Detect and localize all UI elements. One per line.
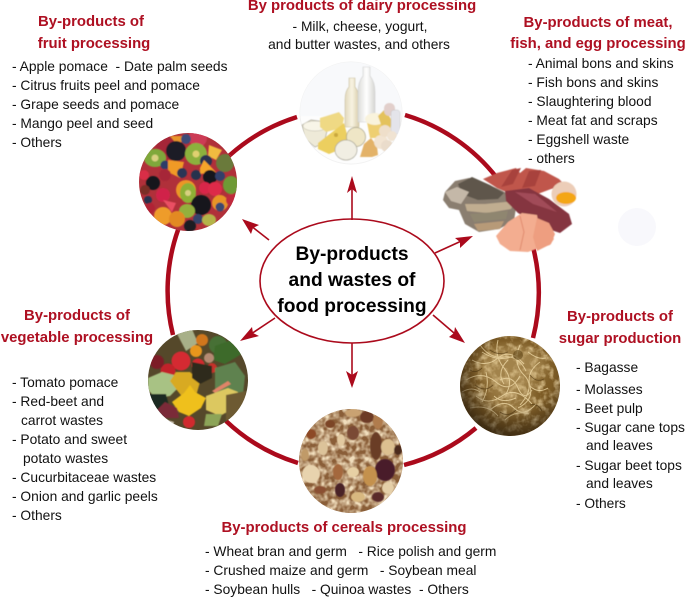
list: cereals: - Crushed maize and germ - Soybean meal [205, 563, 476, 578]
group: dairy processing [248, 0, 476, 52]
photo: vegetable wastes [148, 329, 248, 430]
photo: mixed fruit [139, 129, 239, 232]
list: cereals: - Soybean hulls - Quinoa wastes - Others [205, 582, 469, 597]
heading: sugar: sugar production [559, 331, 681, 347]
list: dairy: - Milk, cheese, yogurt, [293, 19, 427, 34]
heading: fruit: fruit processing [38, 36, 150, 52]
heading: vegetable: By-products of [24, 308, 130, 324]
list: sugar: - Sugar beet tops [576, 458, 682, 473]
photo: cereals and nuts [299, 409, 403, 513]
center title: By-products [296, 244, 408, 265]
list: meat: - Eggshell waste [528, 132, 630, 147]
list: meat: - Slaughtering blood [528, 94, 652, 109]
list: sugar: - Others [576, 496, 626, 511]
list: sugar: - Sugar cane tops [576, 420, 685, 435]
list: fruit: - Mango peel and seed [12, 116, 153, 131]
list: vegetable: - Red-beet and [12, 394, 104, 409]
list: dairy: and butter wastes, and others [268, 37, 450, 52]
list: sugar: and leaves [586, 438, 653, 453]
list: meat: - others [528, 151, 575, 166]
group: meat, fish and egg processing [510, 15, 685, 166]
group: cereals processing [205, 520, 496, 597]
center title: food processing [277, 296, 427, 317]
heading: fruit: By-products of [38, 14, 144, 30]
list: cereals: - Wheat bran and germ - Rice polish and germ [205, 544, 496, 559]
photo: meat, fish and egg [443, 168, 576, 252]
list: vegetable: - Tomato pomace [12, 375, 119, 390]
list: vegetable: - Others [12, 508, 62, 523]
list: sugar: - Bagasse [576, 360, 638, 375]
list: sugar: and leaves [586, 476, 653, 491]
list: vegetable: - Cucurbitaceae wastes [12, 470, 156, 485]
central ring connecting the by-product groups [168, 115, 539, 465]
faint watermark circle [618, 208, 656, 246]
list: fruit: - Grape seeds and pomace [12, 97, 180, 112]
list: sugar: - Molasses [576, 382, 643, 397]
list: fruit: - Citrus fruits peel and pomace [12, 78, 200, 93]
photo: dairy products [300, 62, 402, 164]
list: vegetable: potato wastes [23, 451, 108, 466]
list: fruit: - Apple pomace - Date palm seeds [12, 59, 228, 74]
heading: sugar: By-products of [567, 309, 673, 325]
center title: and wastes of [289, 270, 416, 291]
list: vegetable: - Potato and sweet [12, 432, 127, 447]
heading: meat: fish, and egg processing [510, 36, 685, 52]
heading: cereals: By-products of cereals processing [222, 520, 466, 536]
heading: meat: By-products of meat, [524, 15, 672, 31]
list: vegetable: - Onion and garlic peels [12, 489, 158, 504]
center ellipse [260, 219, 444, 343]
group: fruit processing [12, 14, 228, 150]
group: vegetable processing [1, 308, 158, 523]
list: fruit: - Others [12, 135, 62, 150]
arrows from center to each group [240, 176, 473, 388]
heading: vegetable: vegetable processing [1, 330, 153, 346]
group: sugar production [559, 309, 685, 511]
list: meat: - Fish bons and skins [528, 75, 658, 90]
list: meat: - Meat fat and scraps [528, 113, 658, 128]
list: vegetable: carrot wastes [21, 413, 103, 428]
photo: sugar cane bagasse [460, 336, 560, 436]
list: meat: - Animal bons and skins [528, 56, 674, 71]
list: sugar: - Beet pulp [576, 401, 643, 416]
